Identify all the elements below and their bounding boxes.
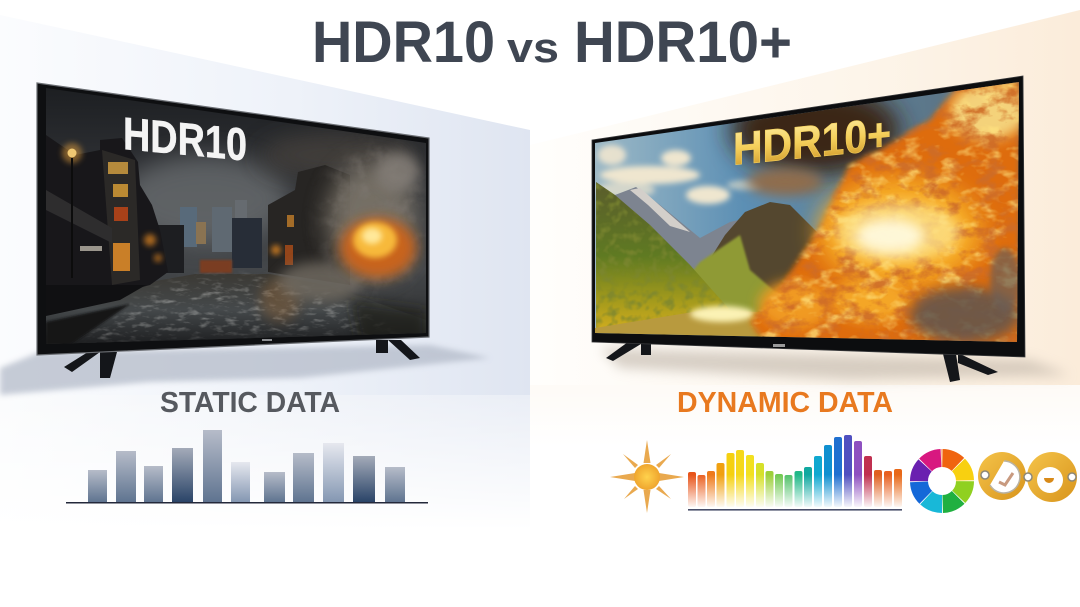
TV stand: left <box>606 342 651 361</box>
skyline <box>158 200 262 273</box>
heading: dynamic data: DYNAMIC DATA <box>677 387 893 419</box>
brand badge <box>773 344 785 347</box>
TV stand: left <box>64 352 117 378</box>
dark band behind logo <box>730 85 900 175</box>
title: HDR10 <box>312 10 495 75</box>
title: HDR10+ <box>574 10 792 75</box>
road <box>46 273 426 344</box>
screen: landscape and fire scene <box>595 82 1019 342</box>
TV logo: HDR10+: HDR10+ <box>733 107 891 175</box>
bar chart: dynamic data spectrum <box>686 435 904 511</box>
heading: static data: STATIC DATA <box>160 387 340 419</box>
fire <box>748 82 1019 342</box>
TV stand: right <box>376 340 420 360</box>
TV logo: HDR10: HDR10 <box>123 107 247 171</box>
brand badge <box>262 339 272 341</box>
icon: sun <box>610 440 684 513</box>
icon: colour wheel <box>919 458 965 504</box>
title <box>312 10 792 75</box>
TV stand: right <box>943 353 998 382</box>
smoke and fire <box>276 146 426 306</box>
TV frame <box>592 76 1025 357</box>
icon: gold infinity badge <box>978 452 1077 502</box>
panel: right backdrop <box>530 10 1080 446</box>
lake <box>595 302 768 337</box>
TV frame <box>37 83 429 355</box>
screen: dark city scene <box>46 85 440 350</box>
bar chart: static data <box>66 430 428 504</box>
buildings right <box>268 165 350 285</box>
TV: HDR10+ <box>592 60 1040 382</box>
clouds <box>595 145 763 204</box>
title: vs <box>507 24 559 71</box>
TV: HDR10 <box>37 83 440 378</box>
mountains <box>595 180 825 330</box>
buildings left <box>46 135 168 316</box>
panel: left backdrop <box>0 15 530 530</box>
